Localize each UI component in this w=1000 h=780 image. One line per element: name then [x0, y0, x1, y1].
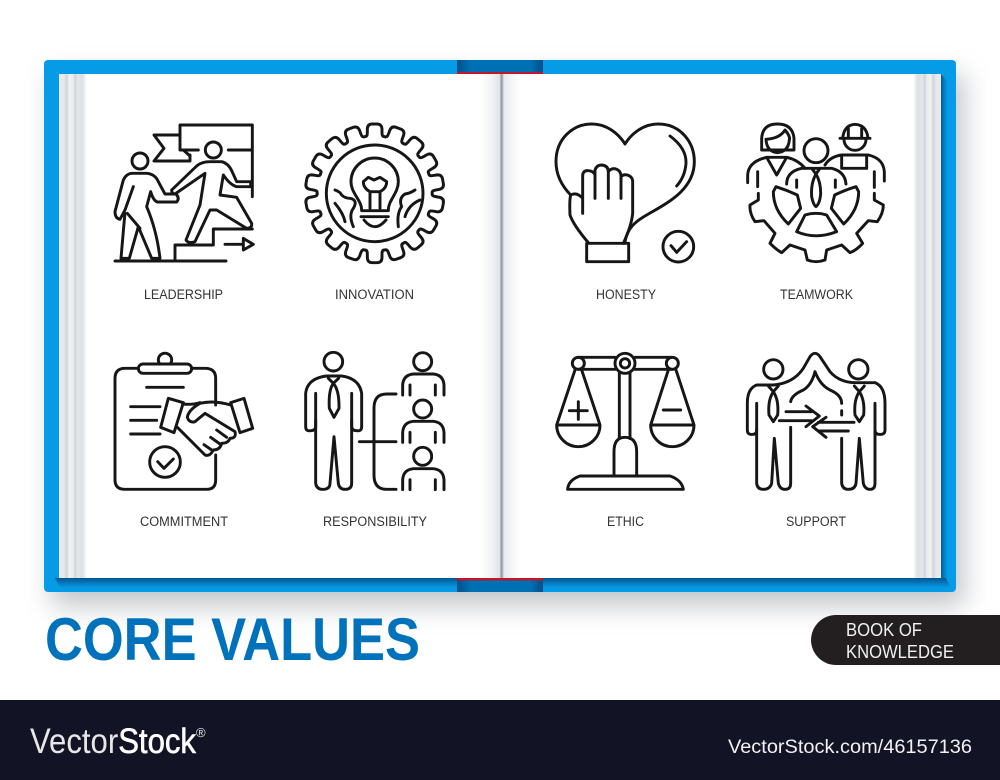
title: CORE VALUES [45, 606, 420, 673]
book [44, 60, 964, 606]
icon: innovation gear and bulb [305, 124, 445, 263]
icon: ethic scales [557, 353, 694, 489]
footer bar [0, 700, 1000, 780]
label: support: SUPPORT [786, 514, 846, 529]
left page edges [59, 74, 87, 578]
icon: leadership [115, 125, 253, 261]
icon: responsibility [306, 352, 444, 490]
right page edges [913, 74, 941, 578]
footer logo: VectorStock [30, 722, 196, 761]
left page [59, 74, 500, 578]
label: teamwork: TEAMWORK [780, 287, 853, 302]
badge: book of knowledge: KNOWLEDGE [846, 642, 954, 662]
footer bar: ® [196, 725, 206, 740]
icon: honesty heart and hand [556, 124, 694, 262]
right page [500, 74, 941, 578]
label: honesty: HONESTY [596, 287, 656, 302]
label: leadership: LEADERSHIP [144, 287, 223, 302]
spine band top [457, 60, 543, 74]
spine band bottom [457, 578, 543, 592]
badge: book of knowledge: BOOK OF [846, 620, 922, 640]
icon: commitment clipboard and handshake [115, 353, 253, 489]
footer bar: VectorStock.com/46157136 [728, 737, 972, 758]
label: innovation: INNOVATION [335, 287, 414, 302]
label: commitment: COMMITMENT [140, 514, 228, 529]
label: responsibility: RESPONSIBILITY [323, 514, 427, 529]
gutter shadow [480, 74, 500, 578]
icon: support high five [747, 353, 885, 489]
icon: teamwork [748, 124, 884, 262]
badge: book of knowledge [811, 615, 1000, 665]
label: ethic: ETHIC [607, 514, 644, 529]
